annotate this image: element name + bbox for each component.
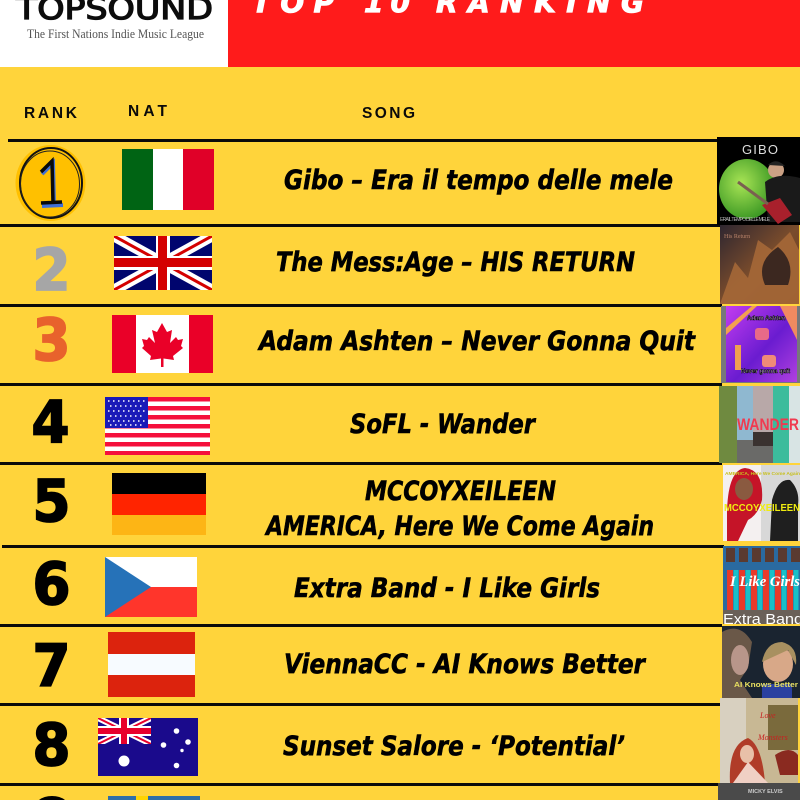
cover: ViennaCC: AI Knows Better <box>734 680 798 689</box>
title banner <box>228 0 800 67</box>
title <box>252 0 644 19</box>
cover: Extra Band <box>723 546 800 628</box>
cover: McCoyXEileen <box>723 465 800 541</box>
cover: Sunset Salore: Love <box>759 711 776 720</box>
flag: Sweden <box>108 796 200 800</box>
song 5 <box>264 476 654 542</box>
rank 6: 6 <box>32 550 70 618</box>
cover: Adam Ashten <box>721 306 800 383</box>
song 7: ViennaCC - AI Knows Better <box>284 649 647 680</box>
cover: Gibo: GIBO <box>742 142 778 157</box>
song 2: The Mess:Age – HIS RETURN <box>276 247 635 278</box>
flag: Austria <box>108 632 195 697</box>
rank 3: 3 <box>32 306 70 374</box>
column heading: nat: NAT <box>128 103 168 120</box>
cover: Extra Band: Extra Band <box>723 611 800 628</box>
song 5: AMERICA, Here We Come Again <box>264 511 654 542</box>
cover: Gibo: ERA IL TEMPO DELLE MELE <box>720 217 771 223</box>
cover: Gibo <box>717 137 800 225</box>
cover: Adam Ashten: Adam Ashten <box>747 316 786 322</box>
song 5: MCCOYXEILEEN <box>365 476 556 507</box>
song 6: Extra Band - I Like Girls <box>294 573 600 604</box>
flag: Germany <box>112 473 206 535</box>
rank 7: 7 <box>32 632 70 700</box>
cover: SoFL Wander <box>719 386 800 463</box>
song 1: Gibo – Era il tempo delle mele <box>284 165 673 196</box>
cover: The Mess:Age <box>720 225 799 304</box>
cover: McCoyXEileen: AMERICA, Here We Come Again <box>725 471 800 476</box>
column heading: rank: RANK <box>24 105 78 122</box>
row dividers <box>0 139 724 786</box>
logo panel <box>0 0 228 67</box>
flag: United States <box>105 397 210 455</box>
cover: The Mess:Age: His Return <box>724 234 750 240</box>
cover: ViennaCC <box>722 626 800 698</box>
rank 8: 8 <box>32 711 70 779</box>
logo tagline: The First Nations Indie Music League <box>27 27 204 41</box>
flag: United Kingdom <box>114 236 212 290</box>
cover: Sunset Salore <box>720 698 798 783</box>
rank 1 badge <box>16 145 86 221</box>
rank 5: 5 <box>32 467 70 535</box>
rank 4: 4 <box>32 388 70 456</box>
cover: Sunset Salore: Monsters <box>757 733 788 742</box>
flag: Australia <box>98 718 198 776</box>
song 4: SoFL - Wander <box>350 409 537 440</box>
flag: Czech Republic <box>105 557 197 617</box>
song 3: Adam Ashten – Never Gonna Quit <box>257 326 696 357</box>
cover: rank 9 <box>718 783 800 800</box>
cover: rank 9: MICKY ELVIS <box>748 789 783 795</box>
rank 2: 2 <box>32 236 70 304</box>
rank 9, cropped by the frame <box>39 796 65 800</box>
column heading: song: SONG <box>362 105 415 122</box>
song 8: Sunset Salore - ‘Potential’ <box>283 731 625 762</box>
flag: Italy <box>122 149 214 210</box>
flag: Canada <box>112 315 213 373</box>
cover: Extra Band: I Like Girls <box>729 574 800 590</box>
cover: Adam Ashten: Never gonna quit <box>741 369 790 375</box>
